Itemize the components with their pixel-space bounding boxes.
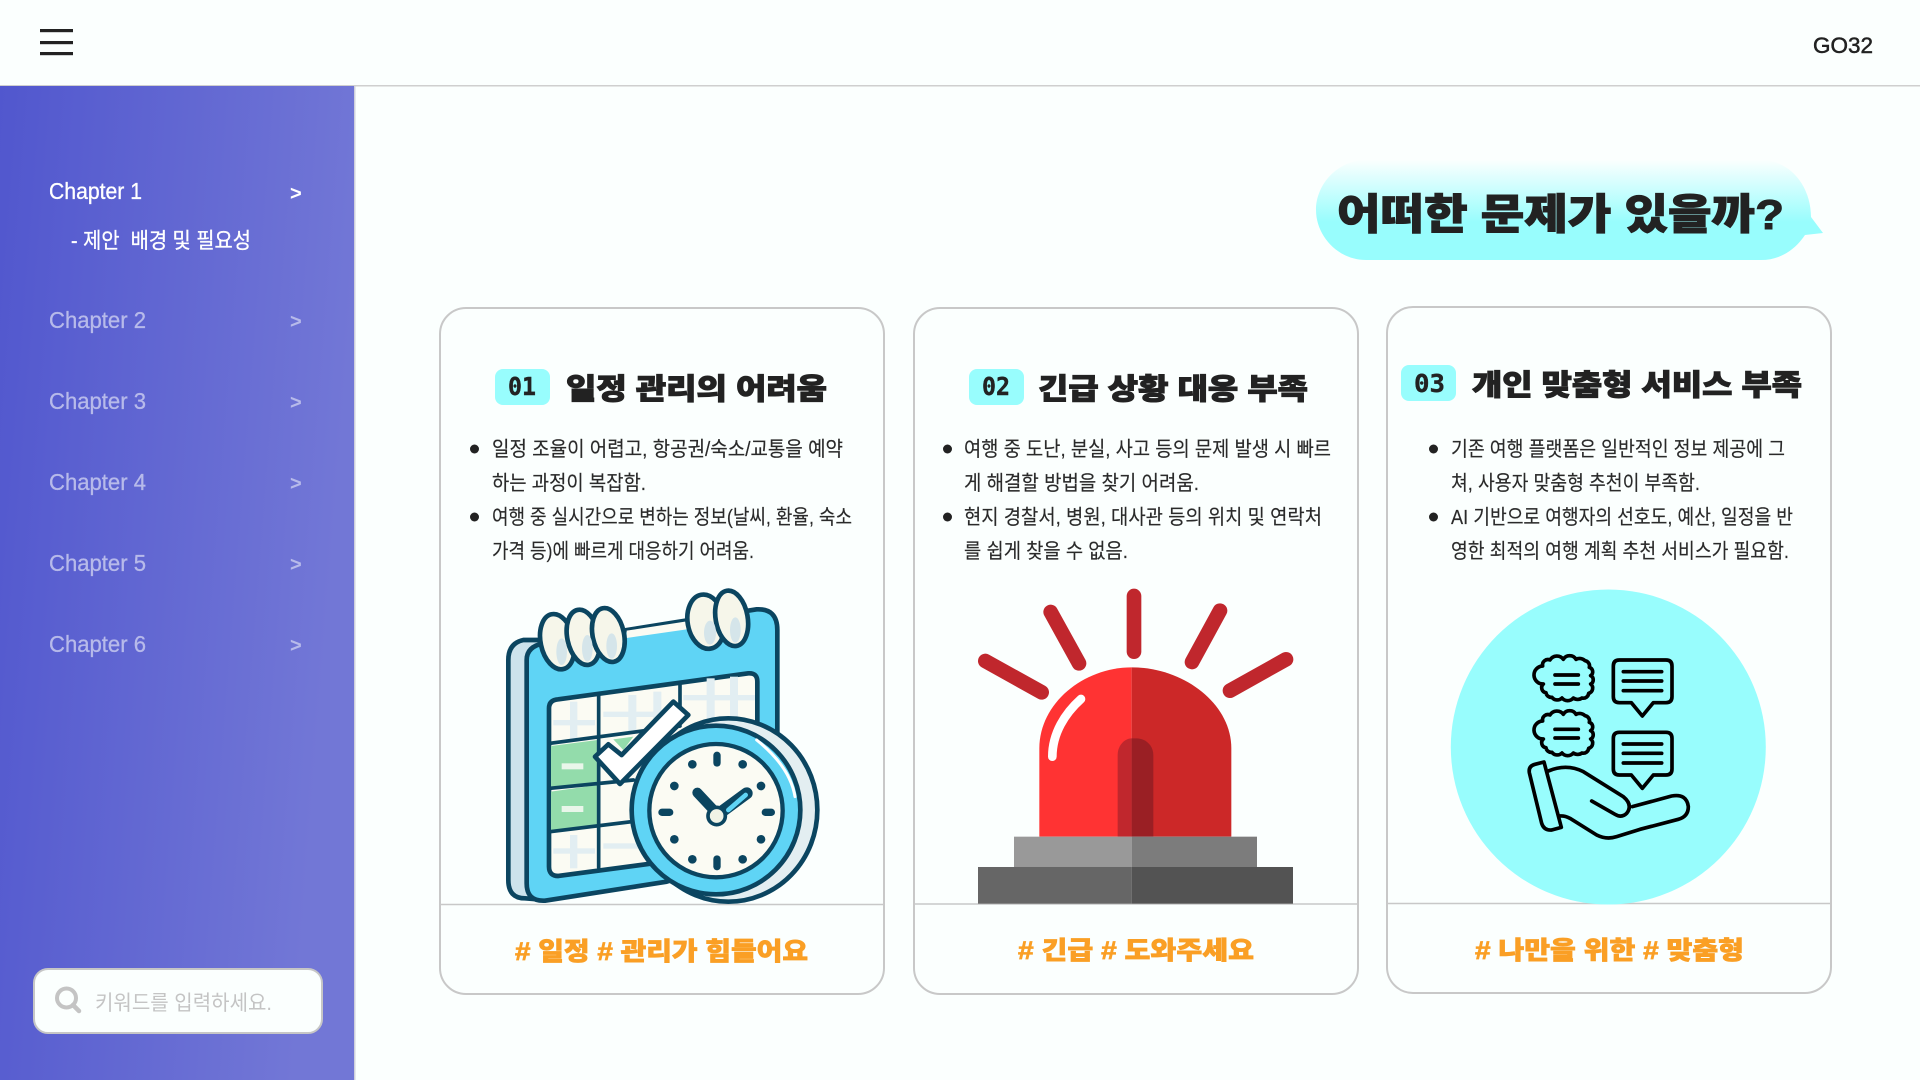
- bullet text: 가격 등)에 빠르게 대응하기 어려움.: [492, 540, 754, 563]
- card heading: 일정 관리의 어려움: [566, 373, 827, 406]
- rings: [535, 588, 752, 673]
- check mark: [595, 702, 688, 784]
- badge 01: 01: [508, 372, 536, 401]
- chapter list: Chapter 2: [49, 307, 146, 333]
- badge 03: [1401, 365, 1456, 401]
- bullet text: 게 해결할 방법을 찾기 어려움.: [964, 472, 1199, 495]
- pale grid pattern: [553, 677, 755, 868]
- chapter list: >: [290, 554, 302, 576]
- panel: card 3 personalization: [1387, 307, 1831, 993]
- chapter list: [49, 307, 302, 657]
- chapter list: Chapter 3: [49, 388, 146, 414]
- bullet text: 현지 경찰서, 병원, 대사관 등의 위치 및 연락처: [964, 506, 1322, 529]
- chapter list: Chapter 5: [49, 550, 146, 576]
- chapter list: >: [290, 311, 302, 333]
- chapter list: >: [290, 392, 302, 414]
- bullet text: [470, 438, 852, 563]
- bullet text: AI 기반으로 여행자의 선호도, 예산, 일정을 반: [1451, 506, 1793, 529]
- search box: [34, 969, 322, 1033]
- hashtag text: # 나만을 위한 # 맞춤형: [1475, 937, 1744, 965]
- bullet text: 여행 중 실시간으로 변하는 정보(날씨, 환율, 숙소: [492, 506, 852, 529]
- badge 01: [495, 369, 550, 405]
- bullet text: 쳐, 사용자 맞춤형 추천이 부족함.: [1451, 472, 1700, 495]
- icon: siren: [978, 596, 1293, 904]
- bullet text: [1429, 438, 1793, 563]
- title speech bubble: 어떠한 문제가 있을까?: [1337, 191, 1784, 238]
- badge 02: 02: [982, 372, 1010, 401]
- bullet text: 기존 여행 플랫폼은 일반적인 정보 제공에 그: [1451, 438, 1785, 461]
- bullet text: 를 쉽게 찾을 수 없음.: [964, 540, 1128, 563]
- chapter list: >: [290, 473, 302, 495]
- bullet text: 여행 중 도난, 분실, 사고 등의 문제 발생 시 빠르: [964, 438, 1331, 461]
- bullet text: 하는 과정이 복잡함.: [492, 472, 646, 495]
- badge 02: [969, 369, 1024, 405]
- bullet text: 일정 조율이 어렵고, 항공권/숙소/교통을 예약: [492, 438, 843, 461]
- title speech bubble: [1316, 160, 1823, 260]
- icon: magnifier: [57, 988, 79, 1011]
- chapter list: >: [290, 635, 302, 657]
- top bar: [0, 0, 1920, 86]
- user label: GO32: [1813, 33, 1873, 58]
- panel: card 2 emergency: [914, 308, 1358, 994]
- card heading: 개인 맞춤형 서비스 부족: [1472, 369, 1802, 402]
- icon: hand with chat bubbles: [1451, 590, 1766, 904]
- card heading: 긴급 상황 대응 부족: [1038, 373, 1308, 406]
- panel: sidebar: [0, 86, 356, 1080]
- panel: card 1 schedule: [440, 308, 884, 994]
- chapter 1 active: Chapter 1: [49, 178, 142, 204]
- badge 03: 03: [1414, 369, 1445, 398]
- clock: [639, 718, 817, 902]
- hashtag text: # 일정 # 관리가 힘들어요: [515, 938, 808, 966]
- bullet text: [943, 438, 1331, 563]
- icon: hamburger menu: [40, 29, 73, 55]
- icon: calendar and clock: [508, 588, 817, 902]
- search box: 키워드를 입력하세요.: [95, 992, 272, 1015]
- chapter 1 active: >: [290, 183, 302, 205]
- chapter 1 active: - 제안 배경 및 필요성: [71, 229, 251, 253]
- chapter list: Chapter 4: [49, 469, 146, 495]
- bullet text: 영한 최적의 여행 계획 추천 서비스가 필요함.: [1451, 540, 1789, 563]
- chapter list: Chapter 6: [49, 631, 146, 657]
- hashtag text: # 긴급 # 도와주세요: [1018, 937, 1254, 965]
- chapter 1 active: [49, 178, 302, 253]
